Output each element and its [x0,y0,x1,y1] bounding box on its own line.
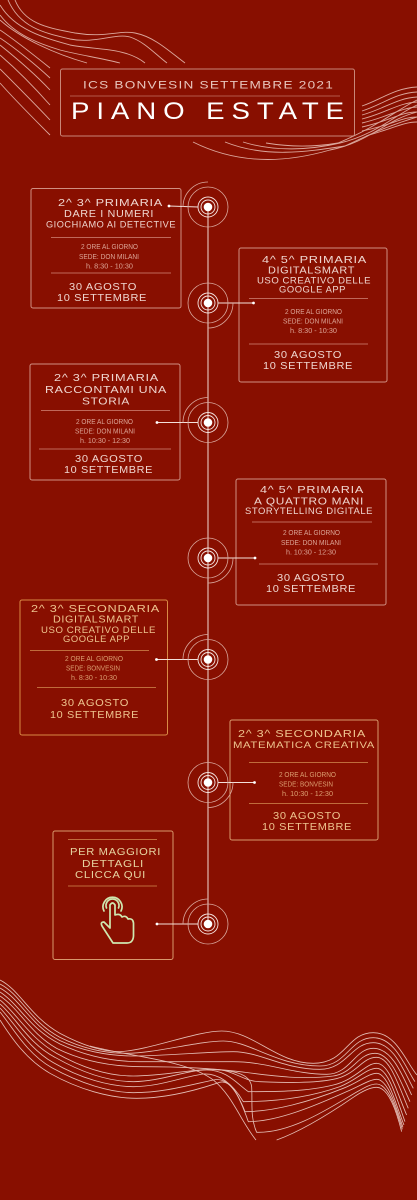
card heading: DIGITALSMART [53,614,139,626]
card heading: GOOGLE APP [63,634,130,644]
card heading: USO CREATIVO DELLE [41,625,156,635]
card dates: 10 SETTEMBRE [263,361,353,372]
card details [279,772,337,798]
node 2 with connector [188,283,255,328]
card dates: 10 SETTEMBRE [57,293,147,304]
card dates: 10 SETTEMBRE [262,822,352,833]
timeline axis [207,207,209,924]
card heading: MATEMATICA CREATIVA [233,740,375,750]
card dates: 30 AGOSTO [273,811,341,822]
card dates: 30 AGOSTO [61,698,129,709]
card heading: 2^ 3^ SECONDARIA [238,729,366,740]
card: 2-3 primaria raccontami una storia [30,364,180,480]
card details: h. 10:30 - 12:30 [286,550,336,556]
card details: SEDE: BONVESIN [66,666,120,672]
call to action text: PER MAGGIORI [70,847,161,858]
node 4 with connector [188,538,256,583]
card heading: STORYTELLING DIGITALE [245,506,373,516]
card heading [245,485,373,516]
top right wave lines [193,87,417,160]
card details: SEDE: DON MILANI [283,318,343,326]
card details: h. 10:30 - 12:30 [282,791,333,798]
card details [65,656,124,682]
card details: h. 8:30 - 10:30 [290,328,337,335]
card details: 2 ORE AL GIORNO [279,772,337,779]
card heading: A QUATTRO MANI [254,496,364,508]
card dates: 30 AGOSTO [75,454,143,465]
card dates: 30 AGOSTO [277,573,345,584]
card details [283,309,343,335]
card: 4-5 primaria a quattro mani [236,479,386,605]
bottom wave lines [0,980,417,1140]
card details: 2 ORE AL GIORNO [76,419,134,426]
card heading: DIGITALSMART [268,266,355,276]
card details [79,244,139,270]
card details [281,530,341,556]
card details: SEDE: DON MILANI [281,540,341,547]
card dates [57,282,147,304]
card heading [257,255,371,294]
card details: h. 8:30 - 10:30 [71,675,117,682]
card heading: DARE I NUMERI [64,209,154,220]
card details: 2 ORE AL GIORNO [65,656,124,663]
title: PIANO ESTATE [71,98,351,125]
card dates [64,454,153,476]
card details: h. 8:30 - 10:30 [86,264,133,270]
card details: SEDE: BONVESIN [279,782,333,788]
card heading: RACCONTAMI UNA [45,385,167,396]
card heading: 4^ 5^ PRIMARIA [260,485,364,496]
card dates: 10 SETTEMBRE [266,584,356,595]
card heading [31,604,160,644]
card: 2-3 secondaria digitalsmart [20,600,168,735]
card dates: 30 AGOSTO [274,350,342,361]
card heading: USO CREATIVO DELLE [257,276,371,286]
card dates [50,698,139,721]
card dates: 10 SETTEMBRE [50,710,139,721]
card heading [233,729,375,750]
subtitle: ICS BONVESIN SETTEMBRE 2021 [83,80,334,92]
card dates: 30 AGOSTO [69,282,137,293]
card dates [263,350,353,372]
card details: 2 ORE AL GIORNO [285,309,343,316]
card heading: 4^ 5^ PRIMARIA [262,255,367,266]
card details: SEDE: DON MILANI [75,428,135,436]
card heading: 2^ 3^ SECONDARIA [31,604,160,615]
card heading: 2^ 3^ PRIMARIA [54,373,159,384]
node 5 with connector [155,634,228,680]
card details: h. 10:30 - 12:30 [80,438,130,445]
card heading: GIOCHIAMO AI DETECTIVE [46,220,176,230]
card heading [45,373,167,408]
card dates: 10 SETTEMBRE [64,465,153,476]
card: per maggiori dettagli [53,831,173,960]
icon: tapping hand [101,897,134,943]
node 1 with connector [168,182,228,227]
top left wave lines [0,0,185,135]
call to action text [70,847,161,881]
node 7 with connector [156,899,228,944]
card details: 2 ORE AL GIORNO [283,530,341,537]
card: 2-3 secondaria matematica creativa [230,720,378,840]
card heading: GOOGLE APP [279,284,346,294]
card heading [46,198,176,230]
card details [75,419,135,445]
card: 2-3 primaria dare i numeri [31,188,181,308]
header panel [60,69,354,136]
card heading: 2^ 3^ PRIMARIA [58,198,163,209]
call to action text: CLICCA QUI [75,870,146,881]
card details: 2 ORE AL GIORNO [81,244,139,251]
node 3 with connector [156,398,228,442]
card dates [262,811,352,833]
card dates [266,573,356,595]
card heading: STORIA [82,396,130,408]
card: 4-5 primaria digitalsmart [239,248,387,382]
card details: SEDE: DON MILANI [79,254,139,261]
call to action text: DETTAGLI [82,859,144,870]
node 6 with connector [188,762,256,808]
